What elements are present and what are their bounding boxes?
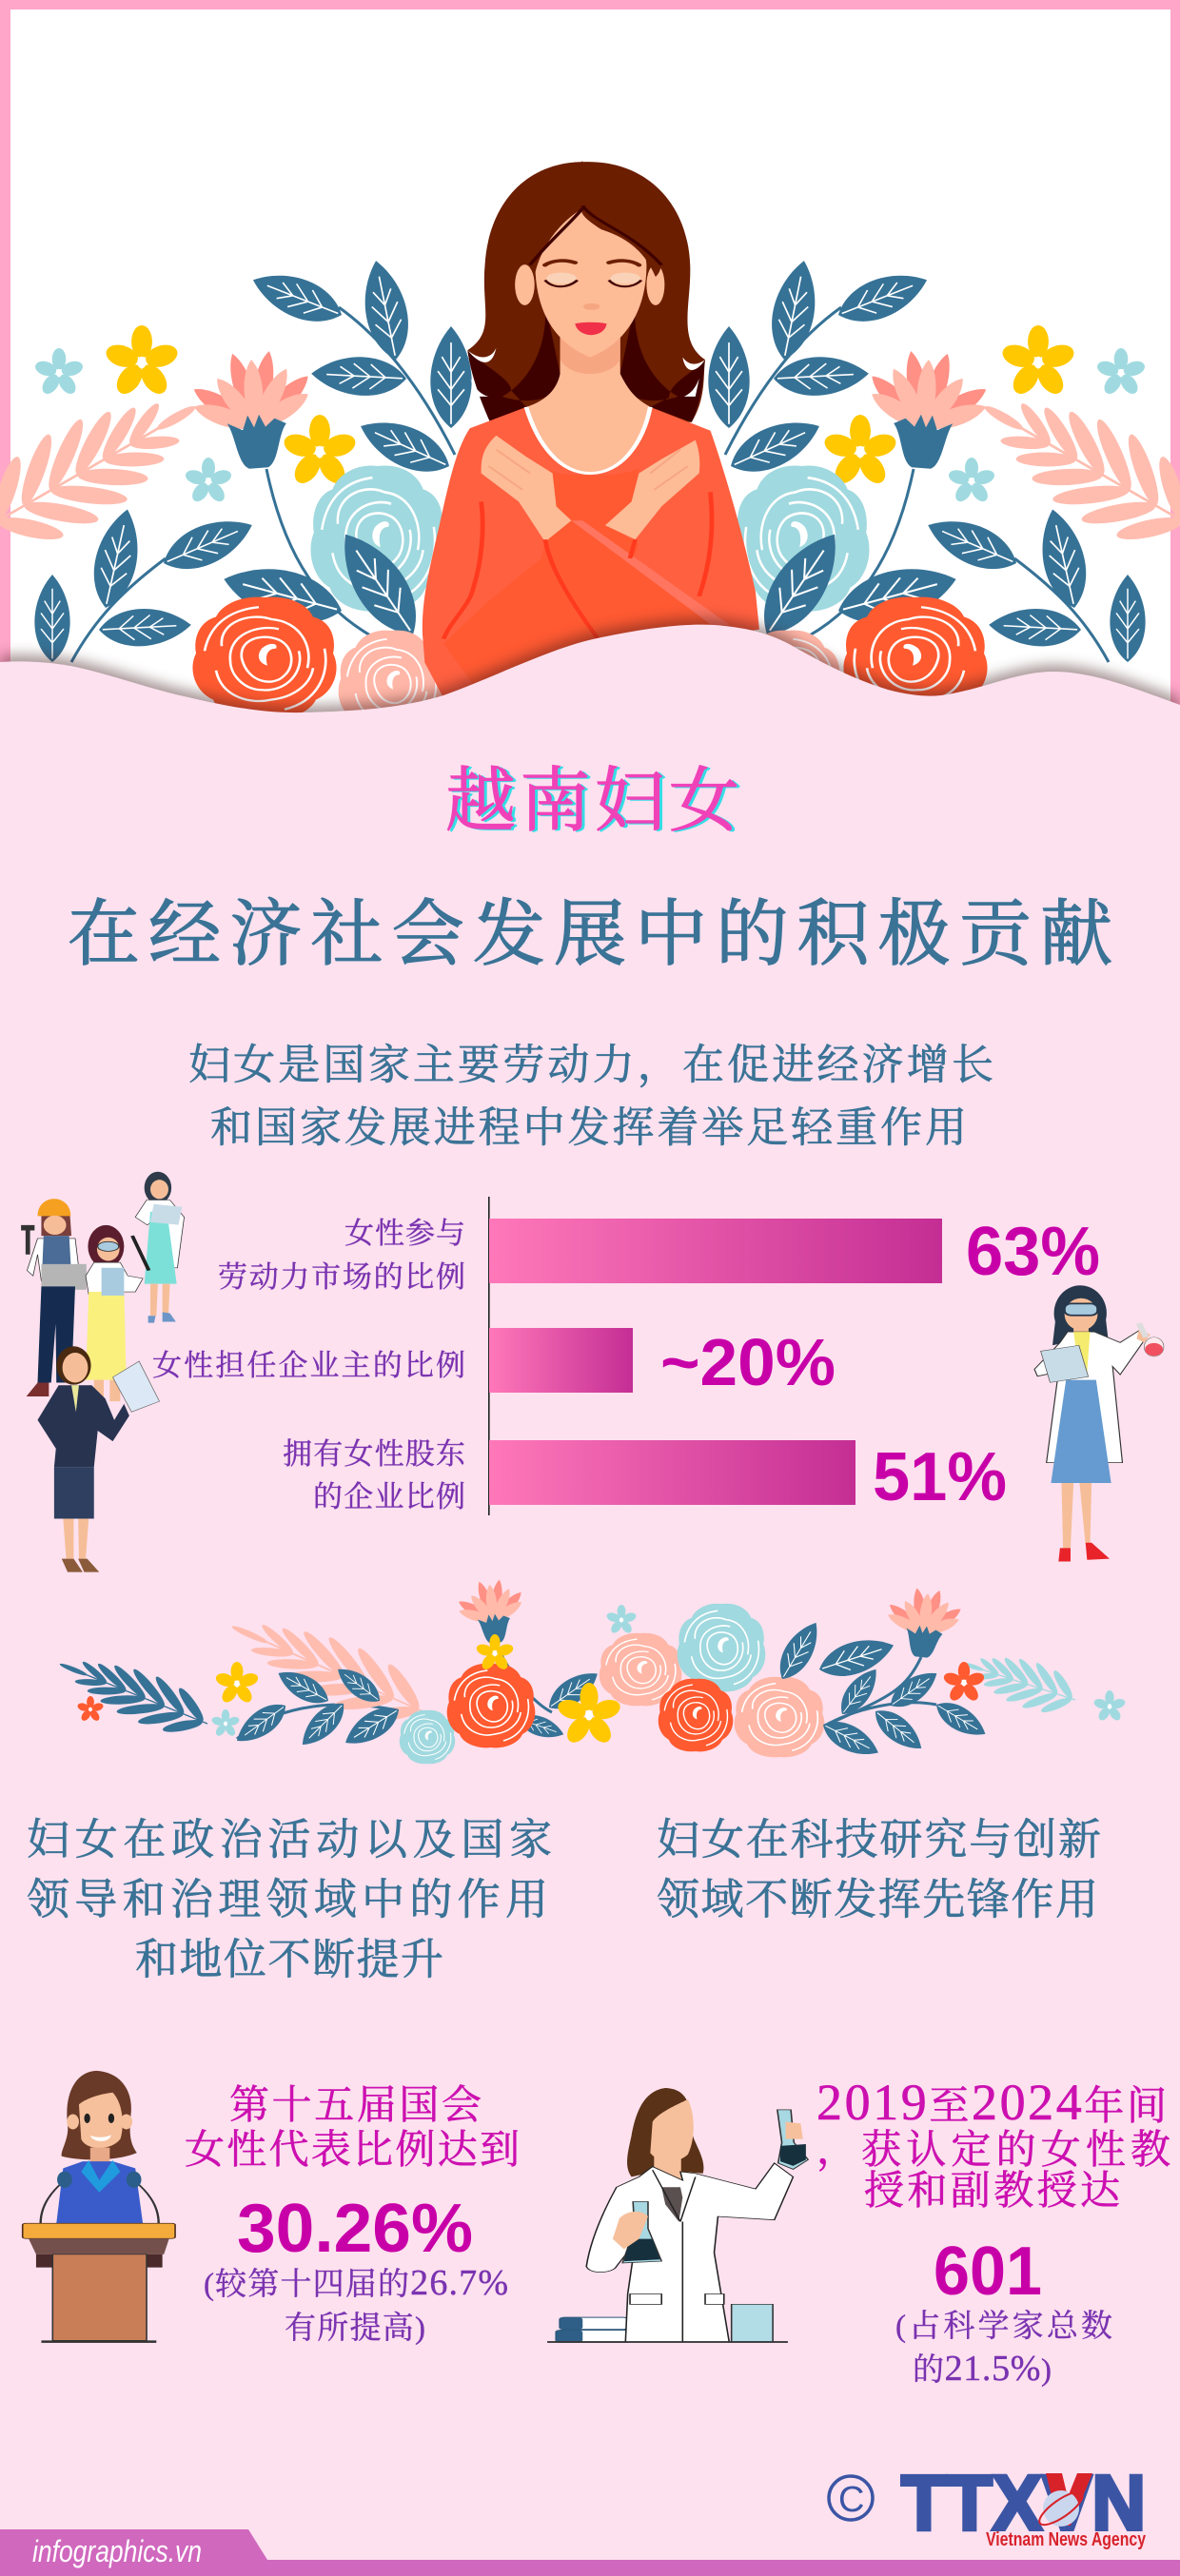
stat note: share of scientists: 的21.5%) (913, 2349, 1052, 2389)
illustration: female scientist (1034, 1285, 1164, 1561)
text: politics (27, 1816, 552, 1983)
logo: TTXVN Vietnam News Agency (829, 2460, 1147, 2550)
woman with yellow skirt (86, 1225, 148, 1401)
intro text: 和国家发展进程中发挥着举足轻重作用 (210, 1104, 967, 1151)
text: science and innovation: 妇女在科技研究与创新 (657, 1816, 1101, 1864)
red V (1046, 2473, 1092, 2526)
wave lower fill (0, 751, 1180, 790)
footer site name: infographics.vn (32, 2534, 202, 2568)
chart axis (488, 1197, 490, 1515)
bar label: labour market share: 女性参与 (344, 1217, 465, 1250)
stat: national assembly heading: 第十五届国会 (229, 2084, 482, 2128)
stat: professors heading: ，获认定的女性教 (816, 2128, 1170, 2173)
value 63%: 63% (966, 1214, 1100, 1290)
white hero panel (10, 10, 1170, 742)
stat note: compared to previous term: 有所提高) (285, 2311, 425, 2346)
bar 20% (489, 1328, 633, 1393)
stat: national assembly heading (185, 2084, 520, 2173)
stat note: compared to previous term (204, 2263, 508, 2346)
bar 63% (489, 1219, 942, 1283)
businesswoman (38, 1346, 159, 1572)
copyright mark: C (838, 2480, 864, 2520)
value 20%: ~20% (660, 1325, 836, 1399)
intro text: 妇女是国家主要劳动力，在促进经济增长 (188, 1042, 993, 1088)
illustration: woman at podium (23, 2071, 175, 2343)
stat: professors heading: 授和副教授达 (864, 2170, 1120, 2214)
bar label: business owners: 女性担任企业主的比例 (152, 1349, 465, 1382)
text: science and innovation: 领域不断发挥先锋作用 (657, 1876, 1098, 1923)
wave divider (0, 625, 1180, 761)
title: Vietnamese women: 越南妇女 (445, 763, 739, 841)
stat value: 30.26%: 30.26% (237, 2191, 473, 2267)
bar 51% (489, 1440, 856, 1505)
lab woman (135, 1172, 185, 1323)
text: politics: 妇女在政治活动以及国家 (27, 1816, 552, 1864)
stat note: share of scientists (895, 2309, 1112, 2389)
globe (1035, 2487, 1087, 2530)
illustration: group of working women (21, 1172, 185, 1572)
text: science and innovation (657, 1816, 1101, 1923)
builder (21, 1199, 87, 1396)
stat value: 601: 601 (934, 2234, 1042, 2310)
stat note: compared to previous term: (较第十四届的26.7% (204, 2263, 508, 2303)
copyright mark (829, 2476, 873, 2520)
value 51%: 51% (873, 1439, 1007, 1515)
pink border frame (0, 0, 1180, 742)
stat: national assembly heading: 女性代表比例达到 (185, 2128, 520, 2173)
stat: professors heading: 2019至2024年间 (816, 2074, 1167, 2131)
wordmark: TTXVN (901, 2460, 1146, 2547)
floral decoration: right (708, 257, 1180, 736)
stat: professors heading (816, 2074, 1170, 2214)
bar chart: female participation (152, 1214, 1100, 1515)
illustration: woman with crossed arms (423, 161, 759, 698)
footer bar (0, 2529, 1180, 2576)
floral decoration: left (0, 257, 472, 736)
bar label: female shareholders: 的企业比例 (313, 1480, 465, 1513)
bar label: female shareholders (283, 1437, 465, 1513)
intro text (188, 1042, 993, 1151)
stat note: share of scientists: (占科学家总数 (895, 2309, 1112, 2344)
floral garland divider (49, 1576, 1127, 1764)
text: politics: 和地位不断提升 (135, 1936, 443, 1983)
bar label: female shareholders: 拥有女性股东 (283, 1437, 465, 1471)
text: politics: 领导和治理领域中的作用 (27, 1876, 548, 1923)
illustration: woman chemist (547, 2088, 808, 2343)
bar label: labour market share (218, 1217, 465, 1294)
bar label: labour market share: 劳动力市场的比例 (218, 1260, 465, 1294)
subtitle: positive contribution: 在经济社会发展中的积极贡献 (68, 895, 1112, 975)
